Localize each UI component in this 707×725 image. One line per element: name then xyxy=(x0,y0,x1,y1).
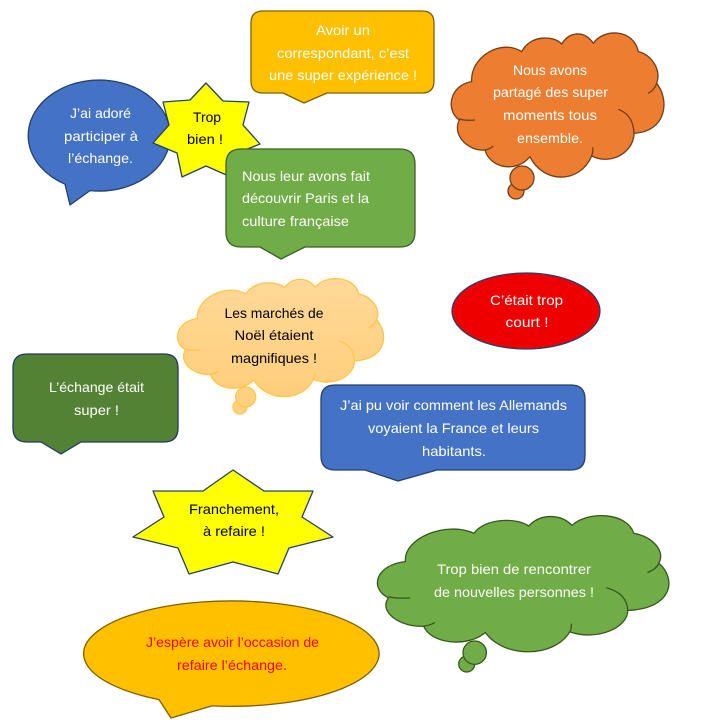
red oval: C'était trop court xyxy=(452,273,600,349)
star text: Trop xyxy=(193,109,221,125)
speech bubble: L'échange était super xyxy=(13,354,178,454)
star text xyxy=(189,501,279,539)
bubble text: J’ai adoré xyxy=(70,105,131,121)
star text: à refaire ! xyxy=(203,523,265,539)
blue oval shape xyxy=(28,80,170,205)
bubble text xyxy=(146,634,319,673)
bubble text: refaire l’échange. xyxy=(177,657,287,673)
bubble text xyxy=(49,379,144,418)
cloud text xyxy=(224,305,324,366)
bubble text xyxy=(64,105,138,166)
yellow seven-point star xyxy=(153,83,260,177)
oval text xyxy=(490,292,563,330)
cloud text: Trop bien de rencontrer xyxy=(437,561,591,577)
dark green rounded callout xyxy=(13,354,178,454)
red ellipse xyxy=(452,273,600,349)
speech bubble: Nous leur avons fait découvrir xyxy=(226,149,415,259)
cloud text: Nous avons xyxy=(513,62,587,78)
bubble text: J’espère avoir l’occasion de xyxy=(146,634,319,650)
bubble text: Avoir un xyxy=(316,22,370,38)
cloud text: de nouvelles personnes ! xyxy=(434,584,594,600)
cloud text: partagé des super xyxy=(493,84,608,100)
speech bubble: J'ai adoré xyxy=(28,80,170,205)
bubble text: correspondant, c’est xyxy=(277,45,409,61)
star: Trop bien xyxy=(153,83,260,177)
speech bubble: Avoir un correspondant xyxy=(251,11,434,103)
star: Franchement à refaire xyxy=(133,470,333,574)
thought cloud: Les marchés de Noël xyxy=(178,279,384,414)
oval text: C’était trop xyxy=(490,292,563,308)
bubble text xyxy=(269,22,417,83)
yellow seven-point star xyxy=(133,470,333,574)
bubble text: voyaient la France et leurs xyxy=(368,420,539,436)
star text: Franchement, xyxy=(189,501,279,517)
green rounded callout xyxy=(226,149,415,259)
bubble text xyxy=(242,168,370,229)
orange cloud tail bubbles xyxy=(508,166,534,199)
cloud text: Noël étaient xyxy=(234,327,314,343)
bubble text: participer à xyxy=(64,128,138,144)
bubble text: Nous leur avons fait xyxy=(242,168,370,184)
bubble text: habitants. xyxy=(422,443,486,459)
blue rounded callout xyxy=(321,385,585,481)
orange cloud body xyxy=(451,33,664,177)
thought cloud: Nous avons partagé xyxy=(451,33,664,199)
light orange cloud tail bubbles xyxy=(233,387,256,414)
bubble text: J’ai pu voir comment les Allemands xyxy=(340,397,567,413)
star text xyxy=(187,109,223,147)
bubble text: culture française xyxy=(242,213,349,229)
bubble text: l’échange. xyxy=(68,150,133,166)
bubble text: L’échange était xyxy=(49,379,144,395)
speech bubble: J'espère avoir l'occasion xyxy=(84,601,379,718)
star text: bien ! xyxy=(187,131,223,147)
bubble text: super ! xyxy=(74,402,119,418)
bubble text: découvrir Paris et la xyxy=(242,190,369,206)
oval text: court ! xyxy=(506,314,548,330)
bubble text: une super expérience ! xyxy=(269,67,417,83)
gold oval shape xyxy=(84,601,379,718)
green cloud tail bubbles xyxy=(459,641,486,672)
cloud text: Les marchés de xyxy=(224,305,324,321)
cloud text: ensemble. xyxy=(517,130,583,146)
light orange cloud body xyxy=(178,279,384,397)
cloud text xyxy=(434,561,594,600)
green cloud body xyxy=(377,516,669,652)
thought cloud: Trop bien de rencontrer xyxy=(377,516,669,672)
bubble text xyxy=(340,397,567,459)
cloud text xyxy=(493,62,608,146)
amber rounded callout xyxy=(251,11,434,103)
speech bubble: J'ai pu voir xyxy=(321,385,585,481)
cloud text: moments tous xyxy=(503,107,597,123)
cloud text: magnifiques ! xyxy=(231,350,317,366)
